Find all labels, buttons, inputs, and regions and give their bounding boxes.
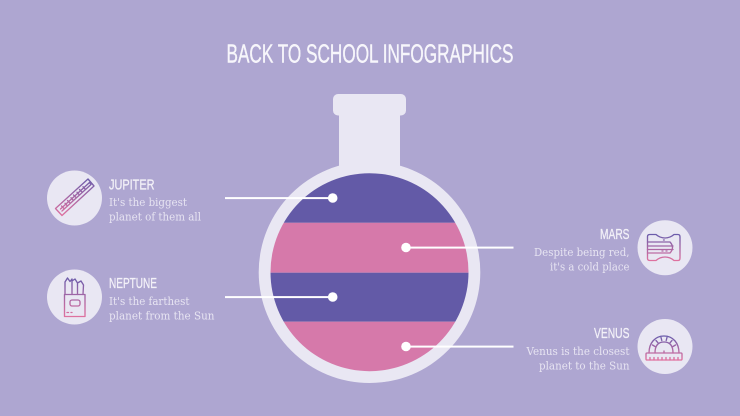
text: Venus description: planet to the Sun bbox=[539, 360, 630, 372]
text: Neptune description: It's the farthest bbox=[109, 295, 190, 308]
panel: Venus bbox=[526, 319, 692, 374]
flask liquid bands bbox=[265, 170, 475, 374]
text: Neptune description: planet from the Sun bbox=[109, 310, 214, 323]
heading: Neptune: NEPTUNE bbox=[109, 275, 157, 292]
flask bbox=[259, 94, 480, 383]
text: Neptune description bbox=[109, 295, 214, 323]
heading: Jupiter: JUPITER bbox=[109, 176, 155, 194]
text: Jupiter description: planet of them all bbox=[109, 211, 201, 224]
text: Jupiter description: It's the biggest bbox=[109, 196, 188, 209]
text: Venus description: Venus is the closest bbox=[526, 345, 630, 358]
text: Jupiter description bbox=[109, 196, 201, 224]
flask body bbox=[259, 94, 480, 383]
connector: Mars bbox=[401, 243, 514, 252]
connector: Jupiter bbox=[225, 193, 338, 203]
panel: Neptune bbox=[47, 270, 214, 324]
text: Venus description bbox=[526, 345, 630, 372]
icon: ruler bbox=[47, 170, 102, 226]
title: BACK TO SCHOOL INFOGRAPHICS bbox=[226, 38, 514, 68]
icon: sharpener bbox=[638, 220, 692, 275]
panel: Mars bbox=[534, 220, 692, 275]
text: Mars description bbox=[534, 246, 630, 274]
heading: Venus: VENUS bbox=[594, 325, 630, 342]
icon: protractor bbox=[638, 319, 692, 374]
heading: Mars: MARS bbox=[600, 226, 630, 243]
text: Mars description: it's a cold place bbox=[550, 261, 630, 274]
icon: crayon box bbox=[47, 270, 102, 324]
panel: Jupiter bbox=[47, 170, 201, 226]
connector: Neptune bbox=[225, 292, 338, 302]
text: Mars description: Despite being red, bbox=[534, 246, 630, 259]
connector: Venus bbox=[401, 342, 514, 351]
